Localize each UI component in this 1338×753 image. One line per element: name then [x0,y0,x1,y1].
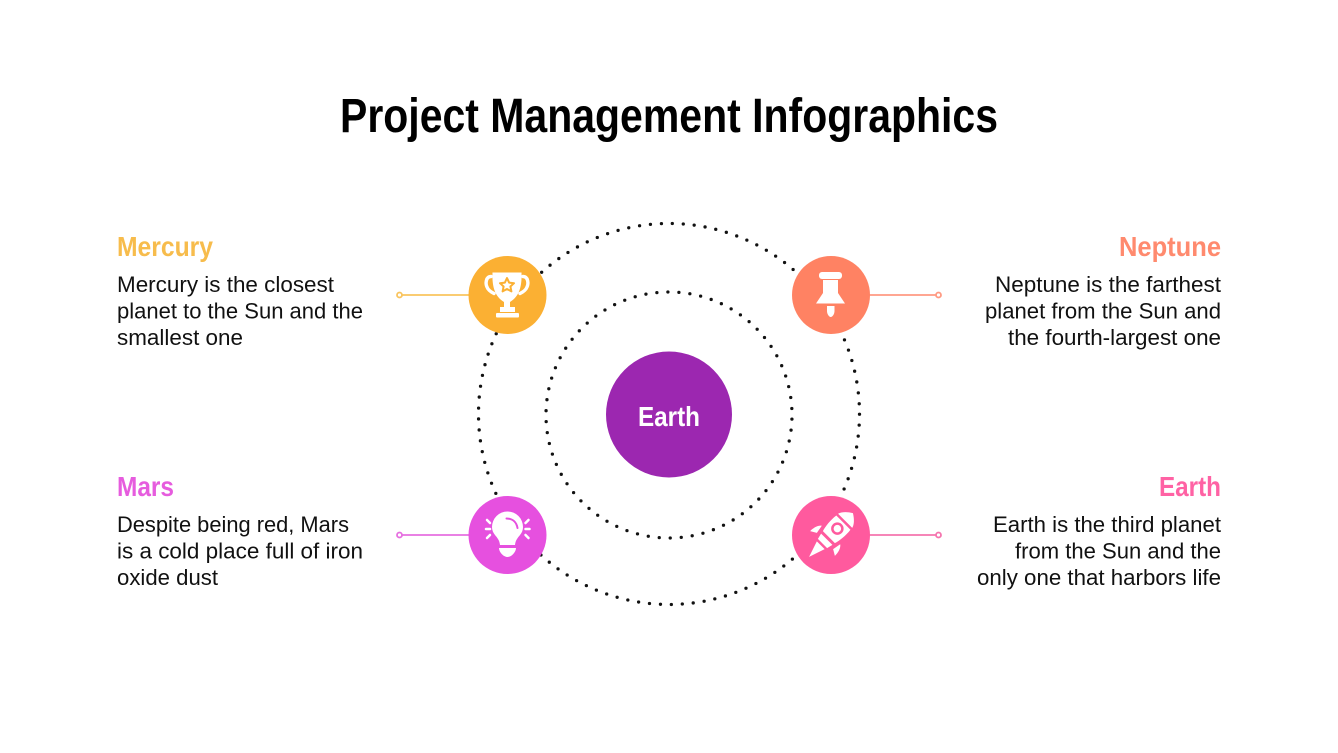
icon: trophy [468,256,546,334]
panel: Earth text: Earth [1159,471,1221,502]
connector: Mars [397,532,469,538]
panel: Neptune text: the fourth-largest one [1008,325,1221,350]
title: Project Management Infographics [340,90,998,143]
panel: Earth text [977,471,1221,590]
connector: Earth [869,532,941,538]
inner dotted orbit [546,292,792,538]
panel: Neptune text [985,231,1221,350]
center circle: Earth [606,352,732,478]
panel: Mercury text: smallest one [117,325,243,350]
panel: Mercury text: Mercury is the closest [117,272,334,297]
icon: rocket [792,496,870,574]
panel: Earth text: from the Sun and the [1015,538,1221,564]
panel: Mars text: Despite being red, Mars [117,512,349,537]
panel: Earth text: only one that harbors life [977,565,1221,590]
panel: Mars text [117,471,363,590]
connector: Mercury [397,292,469,298]
panel: Neptune text: Neptune is the farthest [995,272,1221,297]
panel: Earth text: Earth is the third planet [993,512,1221,537]
panel: Mars text: Mars [117,471,174,502]
connector: Neptune [869,292,941,298]
panel: Neptune text: planet from the Sun and [985,298,1221,324]
panel: Mars text: is a cold place full of iron [117,538,363,564]
outer dotted orbit [478,224,860,604]
center circle: Earth: Earth [638,401,700,432]
icon: push pin [792,256,870,334]
icon: light bulb [468,496,546,574]
panel: Mars text: oxide dust [117,565,218,590]
panel: Neptune text: Neptune [1119,231,1221,262]
panel: Mercury text: planet to the Sun and the [117,298,363,324]
panel: Mercury text: Mercury [117,231,213,262]
panel: Mercury text [117,231,363,350]
